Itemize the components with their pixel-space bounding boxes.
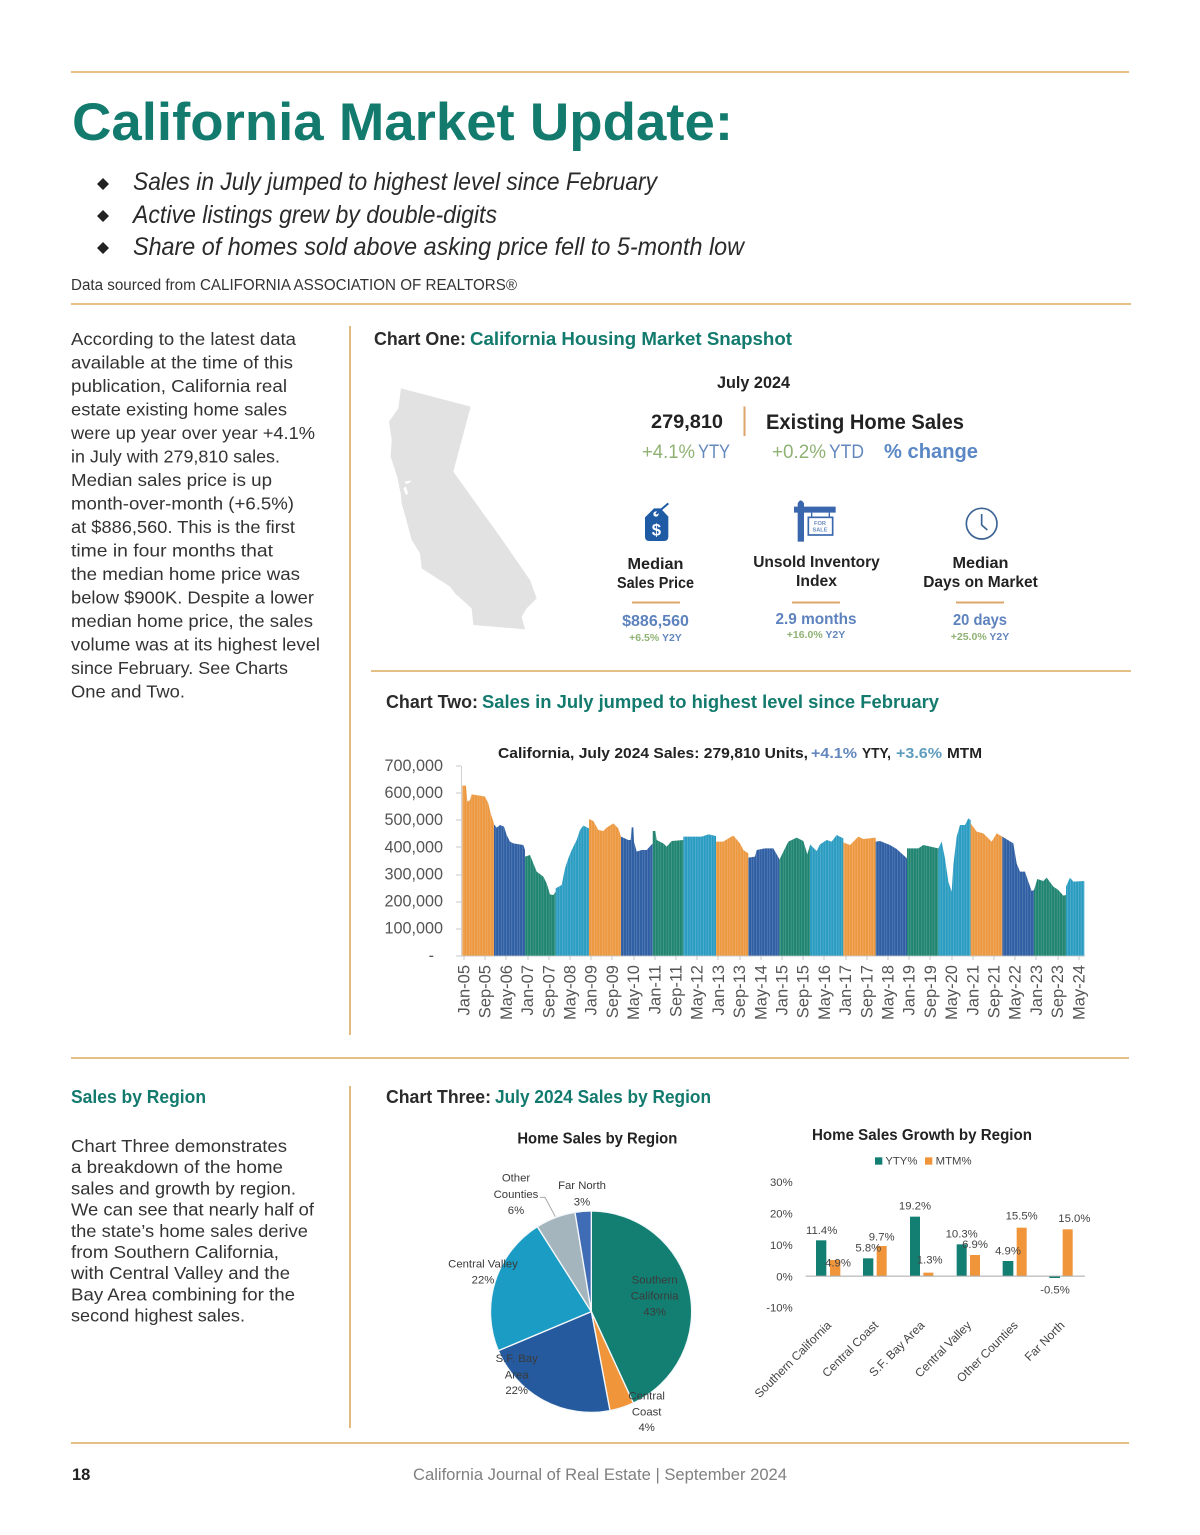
value labels: 1.3% — [917, 1255, 943, 1267]
chart three heading: July 2024 Sales by Region — [495, 1087, 711, 1107]
text block: market summary: Median sales price is up — [71, 470, 272, 490]
category labels: Other Counties — [954, 1318, 1021, 1385]
text block: region summary: second highest sales. — [71, 1306, 245, 1326]
chart two heading: Sales in July jumped to highest level since February — [482, 692, 939, 712]
pie labels: 3% — [574, 1196, 590, 1208]
x axis labels: Jan-13 — [710, 965, 728, 1015]
value labels: 15.5% — [1006, 1210, 1038, 1222]
icon: clock — [966, 508, 997, 539]
x axis labels: Jan-07 — [519, 965, 537, 1015]
icon: price tag — [645, 503, 668, 541]
y axis: 0% — [776, 1271, 793, 1283]
chart three heading: Chart Three: — [386, 1087, 491, 1107]
bar chart title: Home Sales Growth by Region — [812, 1127, 1032, 1144]
text block: region summary: sales and growth by region. — [71, 1178, 296, 1198]
title: California Market Update: — [72, 93, 733, 152]
value labels: -0.5% — [1040, 1285, 1070, 1297]
x axis labels: May-10 — [625, 965, 643, 1020]
chart title: MTM — [947, 745, 982, 762]
text block: region summary: a breakdown of the home — [71, 1157, 283, 1177]
pie labels: S.F. Bay — [496, 1353, 538, 1365]
y axis labels — [384, 757, 443, 965]
chart two heading: Chart Two: — [386, 692, 478, 712]
x axis labels: Sep-07 — [540, 965, 558, 1018]
y axis: 10% — [770, 1240, 793, 1252]
stat: median days on market: 20 days — [953, 612, 1007, 629]
chart title — [498, 745, 982, 762]
chart three heading — [386, 1087, 711, 1107]
icon: price tag: $ — [652, 521, 662, 540]
text block: region summary — [70, 1136, 314, 1326]
existing home sales headline — [642, 406, 978, 463]
stat: median days on market: +25.0% Y2Y — [951, 631, 1009, 643]
text block: region summary: the state’s home sales derive — [71, 1221, 308, 1241]
y axis labels: - — [429, 947, 434, 965]
bar chart: home sales growth by region — [752, 1127, 1090, 1401]
y axis labels: 700,000 — [384, 757, 443, 775]
chart title: YTY, — [862, 745, 891, 762]
bullet list: Share of homes sold above asking price fell to 5-month low — [133, 233, 746, 261]
text block: market summary: One and Two. — [71, 682, 185, 702]
panel: chart one snapshot — [374, 329, 1038, 644]
text block: market summary: in July with 279,810 sales. — [71, 446, 280, 466]
bullet list — [97, 168, 746, 261]
section: sales by region text — [70, 1087, 314, 1326]
x axis labels: Sep-05 — [477, 965, 495, 1018]
x axis labels: Sep-19 — [922, 965, 940, 1018]
y axis: 30% — [770, 1177, 793, 1189]
value labels — [806, 1201, 1090, 1297]
text block: market summary: since February. See Charts — [71, 658, 288, 678]
stat: median sales price: $886,560 — [622, 613, 689, 630]
stat: median days on market: Days on Market — [923, 574, 1038, 591]
chart one heading: California Housing Market Snapshot — [470, 329, 792, 349]
stat: median sales price: +6.5% Y2Y — [629, 632, 682, 644]
pie title: Home Sales by Region — [517, 1131, 677, 1148]
stat: unsold inventory index: 2.9 months — [776, 611, 857, 628]
map of California — [389, 388, 537, 629]
stat: median sales price — [617, 503, 694, 644]
x axis labels: Jan-11 — [646, 965, 664, 1014]
text block: market summary: were up year over year +4.1% — [70, 423, 315, 443]
text block: market summary: the median home price was — [71, 564, 300, 584]
value labels: 9.7% — [869, 1231, 895, 1243]
x axis labels: Sep-21 — [986, 965, 1004, 1018]
stat: median sales price: Sales Price — [617, 575, 694, 592]
category labels: Southern California — [752, 1318, 834, 1401]
text block: region summary: Chart Three demonstrates — [71, 1136, 287, 1156]
value labels: 11.4% — [806, 1225, 837, 1237]
text block: market summary: at $886,560. This is the first — [71, 517, 295, 537]
stat: median days on market — [923, 508, 1038, 643]
value labels: 6.9% — [962, 1239, 988, 1251]
bullet list: Active listings grew by double-digits — [131, 201, 497, 229]
text block: market summary: time in four months that — [71, 540, 273, 560]
x axis labels: Sep-13 — [731, 965, 749, 1018]
stat: unsold inventory index: Index — [796, 573, 837, 590]
x axis labels: Jan-23 — [1028, 965, 1046, 1015]
legend: YTY% — [885, 1156, 917, 1168]
stat: unsold inventory index: Unsold Inventory — [753, 554, 880, 571]
stat: median days on market: Median — [952, 555, 1008, 572]
y axis labels: 100,000 — [384, 920, 443, 938]
text block: region summary: from Southern California, — [71, 1242, 279, 1262]
pie labels: 22% — [505, 1385, 528, 1397]
pie labels: 6% — [508, 1205, 524, 1217]
existing home sales headline: 279,810 — [651, 411, 723, 433]
x axis labels: May-20 — [943, 965, 961, 1020]
x axis labels: May-18 — [880, 965, 898, 1020]
icon: for sale sign — [794, 500, 836, 542]
text block: region summary: Bay Area combining for the — [71, 1284, 295, 1304]
chart title: +4.1% — [811, 745, 857, 762]
pie labels: Counties — [494, 1189, 539, 1201]
text block: market summary: below $900K. Despite a lower — [71, 588, 314, 608]
stat: unsold inventory index: +16.0% Y2Y — [787, 629, 845, 641]
x axis labels: May-22 — [1007, 965, 1025, 1020]
y axis: -10% — [766, 1303, 793, 1315]
pie labels: California — [631, 1291, 679, 1303]
chart one heading: Chart One: — [374, 329, 466, 349]
category labels: Central Coast — [819, 1318, 882, 1380]
footer — [72, 1466, 787, 1484]
existing home sales headline: +0.2% — [772, 441, 826, 463]
bars — [806, 1217, 1085, 1278]
x axis labels: May-14 — [752, 965, 770, 1020]
x axis labels: Sep-09 — [604, 965, 622, 1018]
x axis labels: May-06 — [498, 965, 516, 1020]
pie slices — [490, 1211, 692, 1412]
text block: market summary: available at the time of this — [71, 352, 293, 372]
text block: market summary — [70, 329, 320, 702]
legend — [875, 1156, 972, 1168]
x axis labels: Jan-05 — [456, 965, 474, 1015]
icon: for sale sign: SALE — [812, 528, 828, 534]
data source note: Data sourced from CALIFORNIA ASSOCIATION OF REALTORS® — [71, 277, 518, 294]
value labels: 10.3% — [946, 1229, 978, 1241]
value labels: 15.0% — [1058, 1213, 1090, 1225]
y axis labels: 300,000 — [384, 866, 443, 884]
pie labels: Other — [502, 1173, 530, 1185]
y axis labels: 400,000 — [384, 838, 443, 856]
value labels: 5.8% — [855, 1242, 881, 1254]
text block: market summary: median home price, the sales — [71, 611, 313, 631]
x axis labels: Jan-19 — [901, 965, 919, 1015]
text block: market summary: estate existing home sales — [71, 400, 287, 420]
existing home sales headline: Existing Home Sales — [766, 411, 964, 434]
pie labels: Far North — [558, 1180, 606, 1192]
category labels — [752, 1318, 1067, 1401]
text block: market summary: publication, California real — [71, 376, 287, 396]
category labels: Central Valley — [912, 1318, 974, 1380]
pie labels: Coast — [632, 1407, 662, 1419]
pie labels: 43% — [643, 1307, 666, 1319]
pie labels: Southern — [632, 1275, 678, 1287]
x axis labels: Jan-17 — [837, 965, 855, 1015]
section heading: Sales by Region — [71, 1087, 206, 1107]
existing home sales headline: YTY — [698, 441, 730, 463]
existing home sales headline: +4.1% — [642, 441, 695, 463]
text block: region summary: with Central Valley and the — [70, 1263, 290, 1283]
page number: 18 — [72, 1466, 90, 1484]
y axis labels: 600,000 — [384, 784, 443, 802]
panel: chart three by region — [386, 1087, 1090, 1434]
pie labels: 4% — [638, 1422, 655, 1434]
chart title: +3.6% — [896, 745, 942, 762]
x axis labels: Jan-21 — [964, 965, 982, 1015]
existing home sales headline: YTD — [829, 441, 864, 463]
value labels: 4.9% — [825, 1258, 851, 1270]
bar chart: monthly sales — [461, 766, 1086, 956]
publication line: California Journal of Real Estate | September 2024 — [413, 1466, 787, 1484]
chart title: California, July 2024 Sales: 279,810 Units, — [498, 745, 808, 762]
category labels: Far North — [1022, 1318, 1067, 1364]
x axis labels: Sep-23 — [1049, 965, 1067, 1018]
y axis labels: 500,000 — [384, 811, 443, 829]
text block: region summary: We can see that nearly half of — [71, 1200, 314, 1220]
legend: MTM% — [936, 1156, 972, 1168]
pie chart: home sales by region — [448, 1131, 692, 1434]
category labels: S.F. Bay Area — [866, 1318, 928, 1379]
x axis labels: Sep-15 — [795, 965, 813, 1018]
pie labels — [448, 1173, 679, 1434]
x axis labels: Jan-09 — [583, 965, 601, 1015]
x axis labels: May-12 — [689, 965, 707, 1020]
text block: market summary: According to the latest data — [71, 329, 296, 349]
pie labels: 22% — [472, 1275, 494, 1287]
value labels: 19.2% — [899, 1201, 931, 1213]
icon: for sale sign: FOR — [814, 521, 826, 527]
bullet list: Sales in July jumped to highest level since February — [133, 168, 658, 196]
x axis labels: Sep-17 — [858, 965, 876, 1018]
existing home sales headline: % change — [884, 441, 978, 463]
stat: median sales price: Median — [628, 556, 684, 573]
text block: market summary: month-over-month (+6.5%) — [71, 494, 294, 514]
pie labels: Central Valley — [448, 1258, 518, 1270]
x axis labels: Jan-15 — [774, 965, 792, 1015]
value labels: 4.9% — [995, 1246, 1021, 1258]
x axis labels: May-24 — [1070, 965, 1088, 1020]
y axis — [766, 1177, 793, 1315]
x axis labels: May-08 — [562, 965, 580, 1020]
date label: July 2024 — [717, 374, 791, 392]
y axis: 20% — [770, 1208, 793, 1220]
header block — [71, 93, 746, 294]
stat: unsold inventory index — [753, 500, 880, 641]
pie labels: Central — [628, 1390, 665, 1402]
x axis labels — [456, 965, 1088, 1020]
y axis labels: 200,000 — [384, 892, 443, 910]
x axis labels: May-16 — [816, 965, 834, 1020]
text block: market summary: volume was at its highest level — [71, 634, 320, 654]
panel: chart two sales history — [384, 692, 1088, 1020]
pie labels: Area — [505, 1369, 529, 1381]
x axis labels: Sep-11 — [668, 965, 686, 1017]
